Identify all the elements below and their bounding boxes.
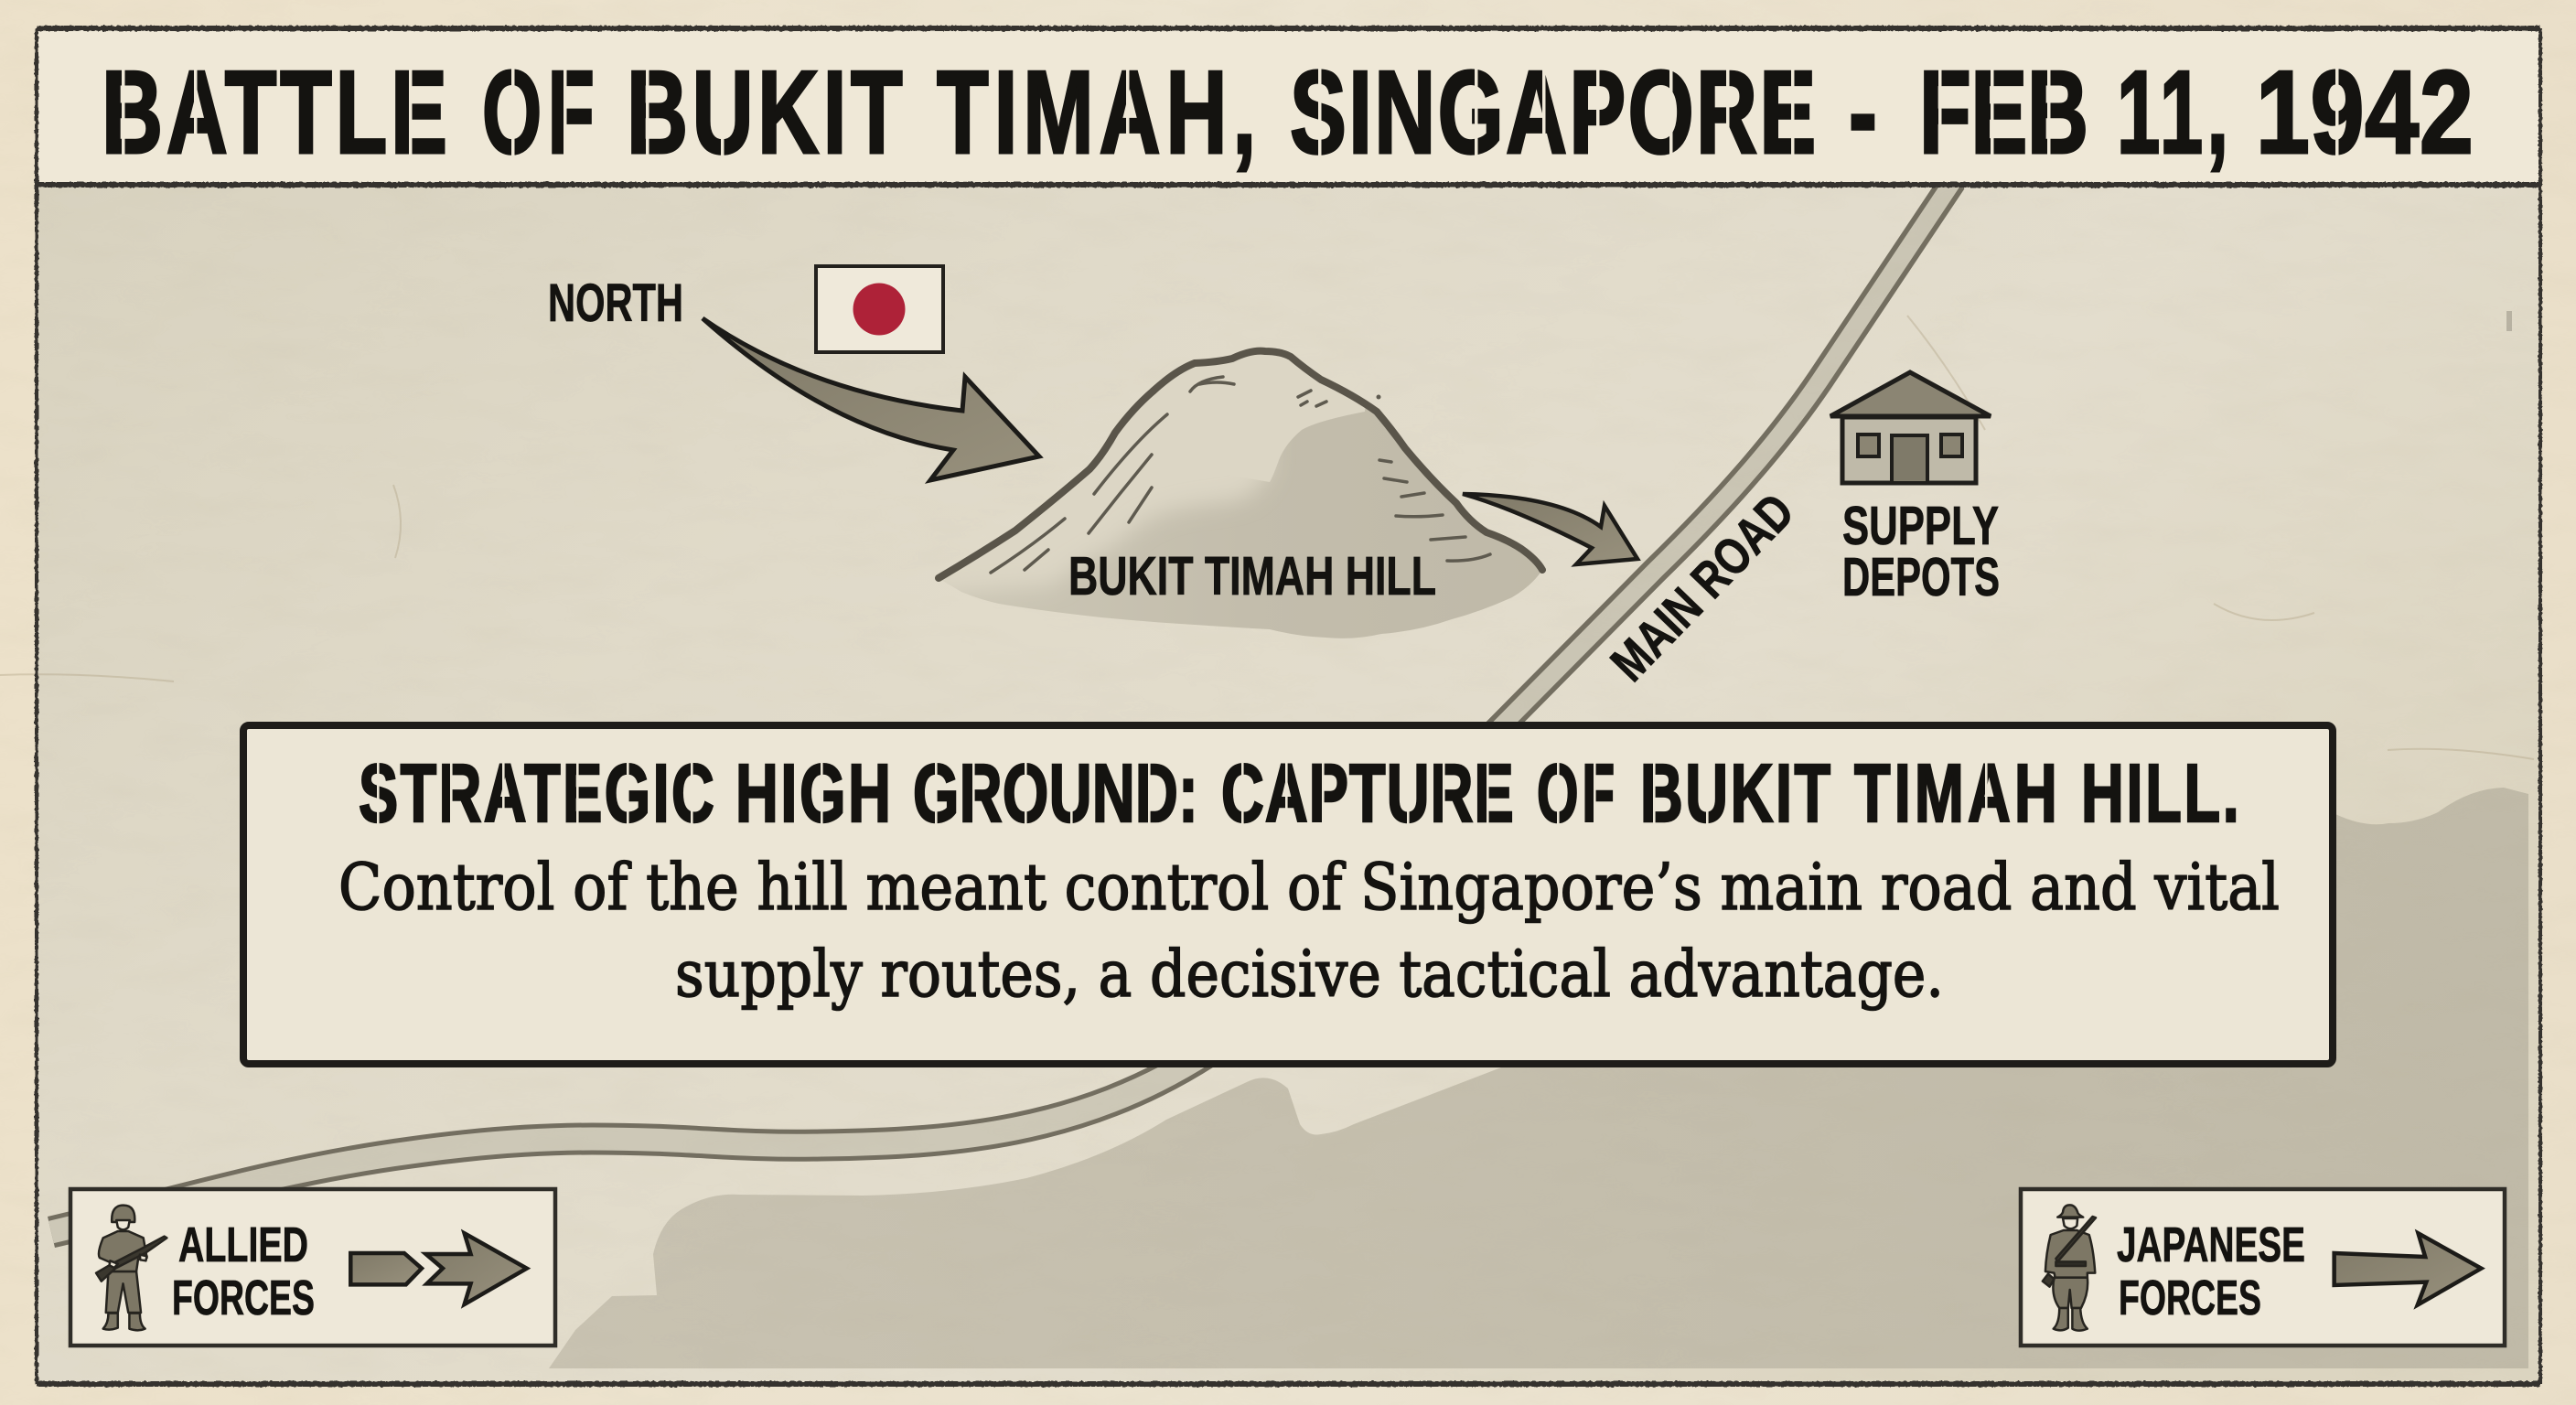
callout heading — [359, 747, 2239, 840]
icon: allied soldier — [96, 1206, 166, 1330]
supply depots label: DEPOTS — [1842, 547, 2000, 607]
callout body text: supply routes, a decisive tactical advantage. — [675, 937, 1944, 1012]
lower road — [51, 1052, 1208, 1232]
supply depots label — [1842, 496, 2000, 607]
callout heading: OF — [1537, 747, 1615, 840]
japanese label: FORCES — [2119, 1271, 2261, 1325]
arrow: toward main road — [1463, 494, 1637, 564]
title: 11, — [2117, 47, 2228, 178]
callout heading: HIGH — [735, 747, 891, 840]
arrow: north attack — [703, 318, 1039, 480]
japanese label — [2117, 1217, 2305, 1325]
callout heading: BUKIT — [1640, 747, 1830, 840]
paper creases and specks — [0, 311, 2534, 759]
callout heading: GROUND: — [913, 747, 1198, 840]
title: OF — [482, 48, 595, 178]
arrow: allied advance — [350, 1233, 527, 1304]
callout panel — [243, 725, 2333, 1064]
icon: supply depot building — [1830, 372, 1991, 483]
legend: allied forces — [70, 1189, 555, 1346]
callout heading: TIMAH — [1854, 747, 2057, 840]
japanese label: JAPANESE — [2117, 1217, 2305, 1272]
title: BUKIT — [627, 46, 903, 178]
legend: japanese forces — [2021, 1189, 2505, 1346]
callout heading: CAPTURE — [1221, 747, 1514, 840]
title: BATTLE — [102, 46, 447, 178]
allied label: ALLIED — [178, 1217, 308, 1272]
heading stencil bridges — [377, 761, 1988, 827]
hill label: BUKIT TIMAH HILL — [1068, 546, 1436, 606]
title: TIMAH, — [937, 46, 1256, 178]
title stencil bridges — [122, 68, 2338, 159]
callout heading: STRATEGIC — [359, 747, 714, 840]
icon: japanese soldier — [2043, 1205, 2096, 1331]
title — [102, 46, 2474, 178]
title: 1942 — [2256, 46, 2474, 177]
title: FEB — [1919, 46, 2088, 178]
main road label: MAIN ROAD — [1599, 482, 1805, 692]
land mass — [549, 788, 2528, 1368]
bukit timah hill — [935, 348, 1546, 638]
supply depots label: SUPPLY — [1842, 496, 1999, 556]
icon: japanese flag — [816, 266, 943, 352]
allied label: FORCES — [172, 1271, 315, 1325]
arrow: japanese advance — [2334, 1233, 2481, 1305]
main road — [1487, 181, 1953, 741]
callout body text: Control of the hill meant control of Singapore’s main road and vital — [338, 850, 2280, 925]
callout heading: HILL. — [2081, 747, 2239, 840]
callout body text — [338, 850, 2280, 1012]
allied label — [172, 1217, 315, 1325]
title: - — [1849, 46, 1877, 178]
title: SINGAPORE — [1290, 46, 1816, 178]
north label: NORTH — [548, 273, 683, 333]
header band — [38, 30, 2538, 184]
